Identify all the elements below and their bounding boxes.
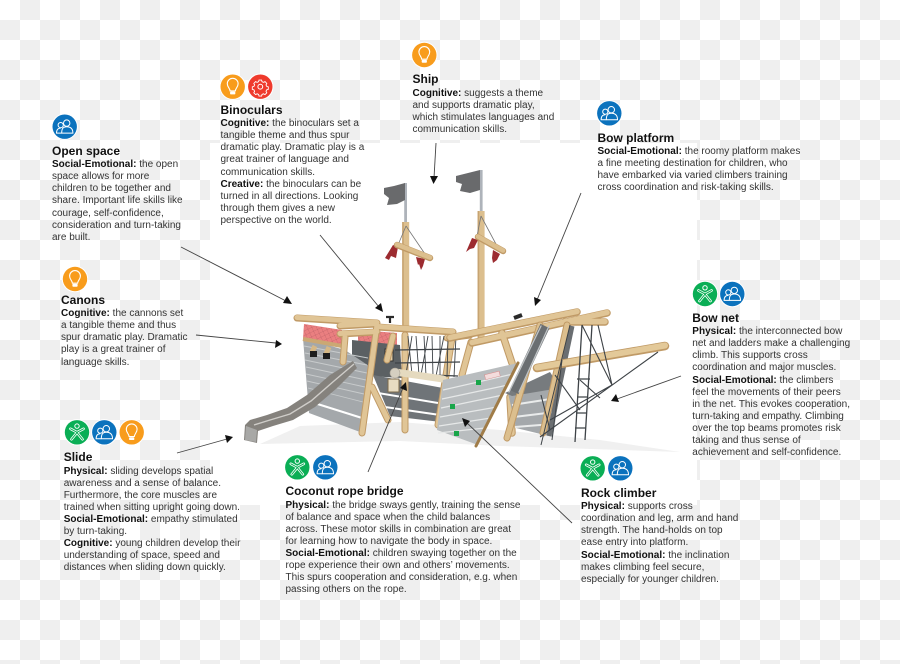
text block: rock climber: especially for younger children. — [581, 574, 719, 585]
text block: canons: play is a great trainer of — [61, 344, 166, 355]
text block: binoculars: Binoculars — [220, 103, 283, 117]
text block: open space: consideration and turn-taking — [52, 220, 181, 231]
rope log — [395, 372, 443, 379]
text block: slide: distances when sliding down quickly. — [64, 562, 226, 573]
text block: canons: language skills. — [61, 357, 129, 368]
text block: bow net: turn-taking and empathy. Climbing — [692, 411, 844, 422]
bow beams — [450, 312, 607, 433]
text block: coconut rope bridge: passing others on the rope. — [286, 584, 407, 595]
text block: binoculars: turned in all directions. Looking — [220, 191, 358, 202]
arrow: binoculars — [320, 235, 383, 312]
slide — [244, 361, 357, 443]
text block: slide: understanding of space, speed and — [64, 550, 220, 561]
text block: ship: Cognitive: suggests a theme — [412, 88, 543, 99]
text block: bow platform: Bow platform — [598, 131, 674, 145]
binoculars on deck — [386, 317, 394, 323]
icon: binoculars creative — [247, 74, 274, 100]
text block: slide: trained when sitting upright going down. — [64, 502, 240, 513]
binoculars on bow — [514, 315, 522, 318]
text block: canons: spur dramatic play. Dramatic — [61, 332, 188, 343]
text block: bow net: Physical: the interconnected bow — [692, 326, 842, 337]
icon: slide physical — [64, 419, 90, 445]
text block: slide: by turn-taking. — [64, 526, 127, 537]
text block: coconut rope bridge — [286, 484, 520, 595]
text block: open space: courage, self-confidence, — [52, 208, 164, 219]
text block: bow net: climb. This supports cross — [692, 350, 808, 361]
icon: slide cognitive — [118, 419, 145, 445]
text block: bow net: feel the movements of their peers — [692, 387, 841, 398]
text block: coconut rope bridge: rope experience their own and others’ movements. — [286, 560, 510, 571]
text block: canons: Cognitive: the cannons set — [61, 308, 183, 319]
text block: coconut rope bridge: Physical: the bridge sways gently, training the sense — [286, 500, 520, 511]
text block: bow platform: cross coordination and risk-taking skills. — [598, 182, 774, 193]
arrow: bow net — [611, 376, 681, 402]
wooden frame and deck beams — [297, 318, 471, 433]
icon: binoculars cognitive — [220, 74, 246, 100]
text block: rock climber: Social-Emotional: the inclination — [581, 550, 729, 561]
text block: slide — [64, 450, 240, 573]
text block: slide: awareness and a sense of balance. — [64, 478, 221, 489]
text block: coconut rope bridge: for learning how to navigate the body in space. — [286, 536, 492, 547]
text block: binoculars: perspective on the world. — [220, 215, 332, 226]
text block: ship: communication skills. — [412, 124, 507, 135]
arrow: coconut rope bridge — [368, 382, 407, 472]
text block: bow net: in the net. This evokes cooperation, — [692, 399, 850, 410]
text block: slide: Physical: sliding develops spatial — [64, 466, 213, 477]
text block: rock climber — [581, 486, 738, 585]
text block: binoculars — [220, 103, 364, 226]
text block: ship: Ship — [412, 72, 438, 86]
text block: canons — [61, 293, 188, 368]
text block: bow net — [692, 311, 850, 458]
text block: rock climber: ease entry into platform. — [581, 537, 688, 548]
text block: binoculars: great trainer of language and — [220, 154, 349, 165]
text block: rock climber: Physical: supports cross — [581, 501, 693, 512]
icon: coconut rope bridge social-emotional — [312, 454, 338, 480]
text block: ship — [412, 72, 554, 135]
text block: bow platform: have embarked via varied climbers training — [598, 170, 788, 181]
text block: binoculars: Cognitive: the binoculars set a — [220, 118, 359, 129]
text block: ship: which stimulates languages and — [412, 112, 554, 123]
text block: slide: Cognitive: young children develop their — [64, 538, 240, 549]
text block: binoculars: tangible theme and thus spur — [220, 130, 349, 141]
bow net and ladders — [540, 325, 658, 445]
text block: open space: Open space — [52, 144, 120, 158]
icon: coconut rope bridge physical — [284, 454, 310, 480]
text block: bow platform: a fine meeting destination for children, who — [598, 158, 788, 169]
ship illustration — [244, 170, 680, 452]
text block: slide: Social-Emotional: empathy stimulated — [64, 514, 238, 525]
text block: open space: Social-Emotional: the open — [52, 159, 178, 170]
arrow: slide — [177, 435, 233, 453]
text block: binoculars: dramatic play. Dramatic play is a — [220, 142, 364, 153]
icon: rock climber physical — [580, 455, 606, 481]
text block: open space: space allows for more — [52, 171, 149, 182]
text block: open space: share. Important life skills like — [52, 195, 183, 206]
text block: canons: Canons — [61, 293, 105, 307]
text block: coconut rope bridge: of balance and space when the child balances — [286, 512, 490, 523]
text block: canons: a tangible theme and thus — [61, 320, 176, 331]
icon: slide social-emotional — [91, 419, 118, 445]
text block: bow net: achievement and self-confidence. — [692, 447, 841, 458]
text block: bow net: Social-Emotional: the climbers — [692, 375, 833, 386]
icon: canons cognitive — [62, 266, 88, 292]
arrow: ship — [430, 143, 438, 184]
left hull planks — [303, 338, 372, 432]
icon: bow platform social-emotional — [596, 100, 622, 127]
text block: rock climber: Rock climber — [581, 486, 656, 500]
text block: bow platform — [598, 131, 800, 193]
text block: ship: and supports dramatic play, — [412, 100, 535, 111]
text block: bow platform: Social-Emotional: the roomy platform makes — [598, 146, 800, 157]
text block: coconut rope bridge: Social-Emotional: children swaying together on the — [286, 548, 517, 559]
icon: ship cognitive — [411, 42, 437, 68]
text block: binoculars: through them gives a new — [220, 203, 335, 214]
arrow: bow platform — [534, 193, 581, 306]
text block: bow net: taking and thus sense of — [692, 435, 801, 446]
ground shadow — [260, 422, 680, 452]
text block: slide: Furthermore, the core muscles are — [64, 490, 217, 501]
text block: rock climber: coordination and leg, arm and hand — [581, 513, 738, 524]
coconut rope bridge net — [395, 336, 460, 377]
arrow: open space — [181, 247, 292, 304]
text block: open space — [52, 144, 183, 243]
bow hull and platform — [505, 372, 562, 437]
front mast with flag and yard — [456, 170, 503, 341]
text block: rock climber: strength. The hand-holds on top — [581, 525, 723, 536]
red stern and deck panels — [303, 324, 342, 346]
text block: coconut rope bridge: across. These motor skills in combination are great — [286, 524, 511, 535]
text block: slide: Slide — [64, 450, 92, 464]
text block: open space: children to be together and — [52, 183, 171, 194]
icon: rock climber social-emotional — [607, 455, 634, 481]
text block: binoculars: Creative: the binoculars can be — [220, 179, 361, 190]
text block: coconut rope bridge: Coconut rope bridge — [286, 484, 404, 498]
text block: rock climber: makes climbing feel secure, — [581, 562, 704, 573]
text block: bow net: over the top beams promotes risk — [692, 423, 841, 434]
text block: coconut rope bridge: This spurs cooperation and consideration, e.g. when — [286, 572, 517, 583]
text block: open space: are built. — [52, 232, 90, 243]
bow diagonals and ramps — [476, 325, 572, 446]
icon: open space social-emotional — [51, 114, 78, 140]
small window — [385, 349, 393, 361]
arrow: canons — [196, 335, 282, 348]
arrow: rock climber — [462, 418, 572, 523]
text block: bow net: net and ladders make a challenging — [692, 338, 850, 349]
text block: bow net: Bow net — [692, 311, 739, 325]
text block: binoculars: communication skills. — [220, 167, 315, 178]
text block: bow net: coordination and major muscles. — [692, 362, 836, 373]
rear mast with flag and yard — [384, 183, 430, 332]
icon: bow net physical — [692, 281, 718, 307]
rock climbing wall — [437, 363, 518, 445]
bowsprit — [537, 346, 665, 368]
icon: bow net social-emotional — [719, 281, 746, 307]
centre hull — [373, 375, 443, 422]
